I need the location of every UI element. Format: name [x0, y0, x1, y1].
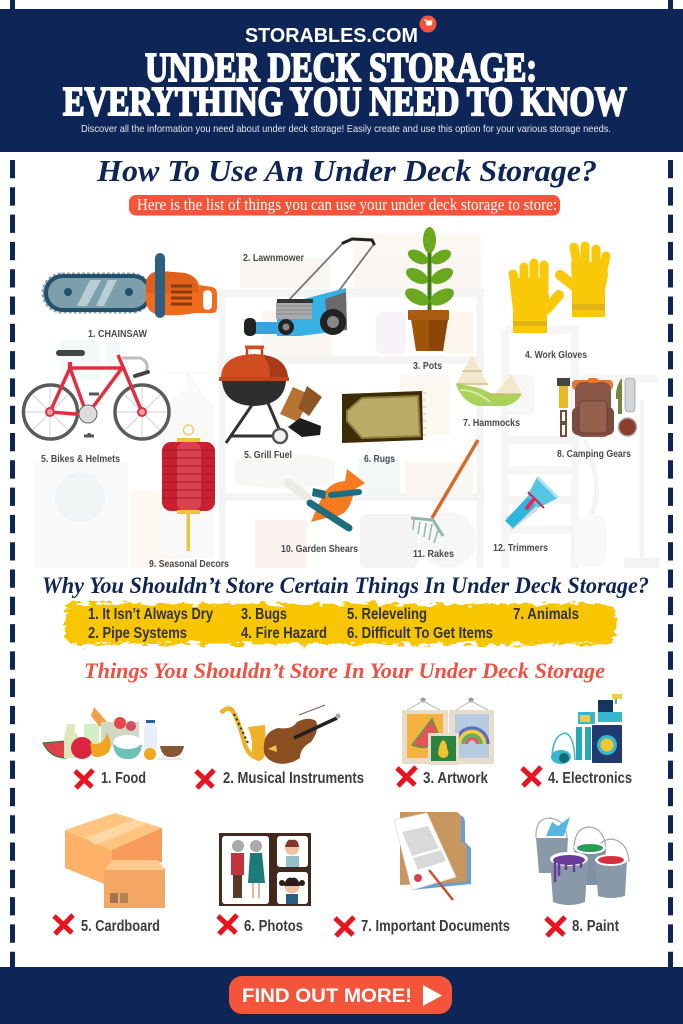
label: 1. Food — [101, 770, 146, 787]
label: grill fuel: 5. Grill Fuel — [244, 449, 292, 461]
button: find out more: FIND OUT MORE! — [242, 986, 412, 1007]
panel: reasons on yellow brush stroke: 6. Difficult To Get Items — [347, 625, 493, 642]
faded garage background — [35, 234, 659, 568]
icon: photo frame — [219, 833, 311, 906]
icon: boxes — [65, 813, 165, 908]
title: UNDER DECK STORAGE: — [145, 44, 537, 90]
icon: saxophone and violin — [221, 705, 340, 764]
label: 4. Electronics — [548, 770, 632, 787]
heading: how to use: How To Use An Under Deck Storage? — [96, 153, 597, 188]
cross mark — [397, 767, 416, 786]
label: rugs: 6. Rugs — [364, 453, 395, 465]
cross mark — [54, 915, 73, 934]
icon: lantern — [162, 425, 215, 551]
icon: framed art — [402, 698, 494, 765]
icon: rake — [411, 440, 478, 543]
icon: garden shears — [288, 469, 365, 528]
icon: grill and fuel — [219, 347, 322, 443]
panel: reasons on yellow brush stroke: 4. Fire Hazard — [241, 625, 327, 642]
label: rakes: 11. Rakes — [413, 548, 454, 560]
label: lawnmower: 2. Lawnmower — [243, 252, 304, 264]
title — [63, 44, 627, 124]
icon: potted plant — [402, 227, 457, 351]
label: pots: 3. Pots — [413, 360, 442, 372]
cross mark — [196, 770, 214, 788]
heading: why you shouldn't store: Why You Shouldn’t Store Certain Things In Under Deck Storage? — [42, 573, 649, 598]
subtitle: Discover all the information you need about under deck storage! Easily create and use this option for your various storage needs. — [81, 123, 611, 135]
label: seasonal decors: 9. Seasonal Decors — [149, 558, 229, 570]
icon: appliances — [551, 694, 622, 764]
icon: camping gear — [557, 378, 636, 437]
panel: reasons on yellow brush stroke: 2. Pipe Systems — [88, 625, 187, 642]
icon: work gloves — [510, 246, 608, 333]
item: musical instruments — [196, 705, 364, 788]
label: camping gears: 8. Camping Gears — [557, 448, 631, 460]
footer band — [0, 967, 683, 1024]
icon: lawnmower — [244, 239, 374, 336]
icon: bicycle — [24, 353, 169, 439]
cross mark — [335, 917, 354, 936]
label: bikes: 5. Bikes & Helmets — [41, 453, 120, 465]
item: food — [43, 707, 184, 788]
item: artwork — [397, 698, 494, 787]
label: 6. Photos — [244, 918, 303, 935]
label: chainsaw: 1. CHAINSAW — [88, 328, 147, 340]
panel: reasons on yellow brush stroke: 3. Bugs — [241, 606, 287, 623]
cross mark — [522, 767, 541, 786]
icon: contract and folder — [394, 812, 471, 900]
panel: reasons on yellow brush stroke — [65, 604, 616, 644]
label: 3. Artwork — [423, 770, 488, 787]
label: trimmers: 12. Trimmers — [493, 542, 548, 554]
label: hammocks: 7. Hammocks — [463, 417, 520, 429]
icon: food — [43, 707, 184, 760]
icon: chainsaw — [43, 258, 217, 315]
header band — [0, 9, 683, 152]
panel: reasons on yellow brush stroke: 7. Animals — [513, 606, 579, 623]
cross mark — [75, 770, 93, 788]
item: cardboard — [54, 813, 165, 935]
label: 5. Cardboard — [81, 918, 160, 935]
item: important documents — [335, 812, 510, 936]
item: electronics — [522, 694, 632, 787]
button: find out more — [229, 976, 452, 1015]
panel: reasons on yellow brush stroke: 5. Releveling — [347, 606, 427, 623]
intro pill: Here is the list of things you can use your under deck storage to store: — [137, 195, 557, 214]
label: 7. Important Documents — [361, 918, 510, 935]
heading: things you shouldn't store: Things You Shouldn’t Store In Your Under Deck Storage — [84, 658, 605, 683]
icon: paint cans — [536, 817, 629, 905]
icon: trimmer — [505, 477, 558, 530]
cross mark — [218, 915, 237, 934]
label: 8. Paint — [572, 918, 620, 935]
icon: hammock — [456, 355, 523, 406]
cross mark — [546, 917, 565, 936]
label: garden shears: 10. Garden Shears — [281, 543, 358, 555]
icon: rug — [342, 391, 426, 443]
item: photos — [218, 833, 311, 935]
brand logo: STORABLES.COM — [245, 25, 418, 47]
brand logo — [245, 16, 436, 47]
panel: reasons on yellow brush stroke: 1. It Isn’t Always Dry — [88, 606, 213, 623]
label: 2. Musical Instruments — [223, 770, 364, 787]
label: work gloves: 4. Work Gloves — [525, 349, 587, 361]
item: paint — [536, 817, 629, 936]
